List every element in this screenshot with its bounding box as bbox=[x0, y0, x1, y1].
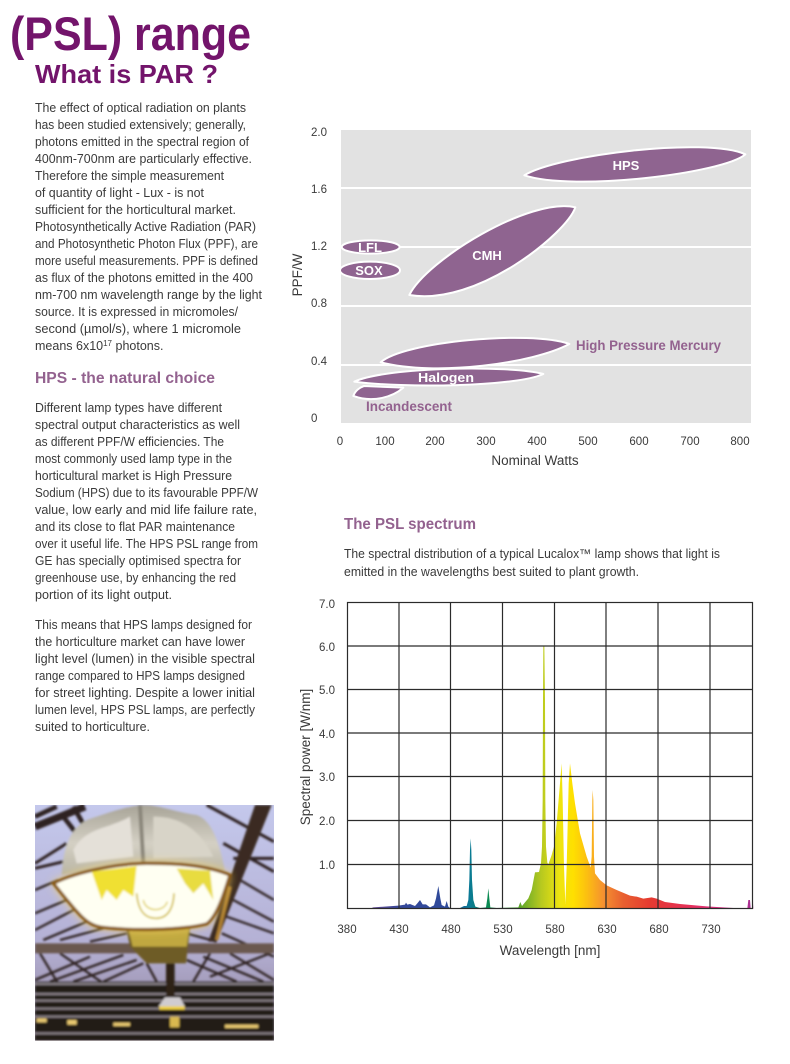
y axis labels: 2.0 bbox=[319, 816, 335, 828]
reflector bag bbox=[62, 805, 225, 875]
yellow fringes bbox=[92, 866, 137, 900]
x axis labels: 200 bbox=[425, 436, 445, 448]
y axis labels: 6.0 bbox=[319, 642, 335, 654]
y axis labels: 0.4 bbox=[311, 356, 328, 368]
y axis labels: 2.0 bbox=[311, 127, 327, 139]
text block: horticulture lamps: lumen level, HPS PSL lamps, are perfectly bbox=[35, 703, 256, 717]
text block: what is PAR: nm-700 nm wavelength range by the light bbox=[35, 288, 263, 302]
photo: lamp in greenhouse bbox=[35, 805, 274, 1041]
lamp type labels: HPS bbox=[613, 158, 640, 173]
text block: what is PAR: Photosynthetically Active Radiation (PAR) bbox=[35, 220, 256, 234]
horizontal girder bbox=[35, 943, 274, 953]
x axis labels: 300 bbox=[476, 436, 496, 448]
text block: what is PAR: more useful measurements. PPF is defined bbox=[35, 254, 258, 268]
lamp type labels: SOX bbox=[355, 263, 383, 278]
x axis labels: 580 bbox=[545, 924, 565, 936]
x axis labels: Nominal Watts bbox=[491, 453, 579, 468]
lamp type labels bbox=[355, 158, 721, 414]
y axis labels: 1.6 bbox=[311, 184, 327, 196]
glowing lamp opening bbox=[53, 863, 230, 930]
x axis labels: Wavelength [nm] bbox=[500, 943, 600, 958]
text block: spectral distribution bbox=[344, 547, 720, 579]
text block: spectral distribution: The spectral distribution of a typical Lucalox™ lamp shows that light is bbox=[344, 547, 720, 561]
text block: HPS: and its close to flat PAR maintenance bbox=[35, 520, 235, 534]
text block: what is PAR: 17 bbox=[103, 339, 113, 348]
y axis labels bbox=[298, 599, 335, 872]
heading: What is PAR: What is PAR ? bbox=[35, 59, 218, 89]
lamp base bbox=[126, 928, 190, 963]
text block: horticulture lamps: suited to horticulture. bbox=[35, 720, 150, 734]
text block: HPS: GE has specially optimised spectra for bbox=[35, 554, 241, 568]
x axis labels: 400 bbox=[527, 436, 547, 448]
diagonal roof girder bbox=[208, 805, 272, 942]
chart: PPF/W against nominal watts bbox=[290, 127, 751, 468]
text block: HPS: Sodium (HPS) due to its favourable PPF/W bbox=[35, 486, 258, 500]
text block: horticulture lamps: light level (lumen) in the visible spectral bbox=[35, 652, 255, 666]
x axis labels: 680 bbox=[649, 924, 669, 936]
x axis labels: 480 bbox=[441, 924, 461, 936]
y axis labels: 0.8 bbox=[311, 298, 327, 310]
text block: HPS: over it useful life. The HPS PSL range from bbox=[35, 537, 258, 551]
text block: HPS bbox=[35, 401, 258, 602]
x axis labels: 600 bbox=[629, 436, 649, 448]
text block: what is PAR: 400nm-700nm are particularly effective. bbox=[35, 152, 252, 166]
x axis labels: 430 bbox=[389, 924, 409, 936]
text block: what is PAR: photons. bbox=[112, 339, 163, 353]
y axis labels: 4.0 bbox=[319, 729, 335, 741]
text block: HPS: Different lamp types have different bbox=[35, 401, 223, 415]
text block: horticulture lamps: This means that HPS lamps designed for bbox=[35, 618, 252, 632]
x axis labels: 530 bbox=[493, 924, 513, 936]
glow halo bbox=[53, 863, 230, 930]
y axis labels: 5.0 bbox=[319, 685, 335, 697]
lower greenhouse bbox=[35, 982, 274, 1041]
lamp type labels: High Pressure Mercury bbox=[576, 338, 721, 353]
text block: HPS: portion of its light output. bbox=[35, 588, 172, 602]
text block: what is PAR: means 6x10 bbox=[35, 339, 103, 353]
text block: horticulture lamps: the horticulture market can have lower bbox=[35, 635, 245, 649]
text block: horticulture lamps bbox=[35, 618, 256, 734]
text block: HPS: greenhouse use, by enhancing the red bbox=[35, 571, 236, 585]
title: (PSL) range bbox=[10, 7, 251, 60]
y axis labels: 1.2 bbox=[311, 241, 327, 253]
lamp type labels: LFL bbox=[358, 240, 382, 255]
y axis labels: 7.0 bbox=[319, 599, 335, 611]
y axis labels: 0 bbox=[311, 413, 317, 425]
x axis labels: 500 bbox=[578, 436, 598, 448]
text block: what is PAR bbox=[35, 101, 263, 353]
text block: what is PAR: photons emitted in the spectral region of bbox=[35, 135, 250, 149]
roof beams bbox=[35, 805, 274, 987]
x axis labels: 800 bbox=[730, 436, 750, 448]
bulb bbox=[137, 893, 174, 918]
text block: what is PAR: has been studied extensively; generally, bbox=[35, 118, 246, 132]
heading: HPS the natural choice: HPS - the natural choice bbox=[35, 370, 215, 387]
text block: what is PAR: of quantity of light - Lux - is not bbox=[35, 186, 205, 200]
chart: lamp spectrum bbox=[298, 599, 753, 958]
text block: horticulture lamps: for street lighting. Despite a lower initial bbox=[35, 686, 255, 700]
lamp type labels: Halogen bbox=[418, 370, 474, 385]
text block: what is PAR: source. It is expressed in micromoles/ bbox=[35, 305, 239, 319]
text block: HPS: value, low early and mid life failure rate, bbox=[35, 503, 257, 517]
grid bbox=[347, 602, 753, 908]
x axis labels: 0 bbox=[337, 436, 343, 448]
text block: horticulture lamps: range compared to HPS lamps designed bbox=[35, 669, 245, 683]
x axis labels: 380 bbox=[337, 924, 357, 936]
text block: what is PAR: Therefore the simple measurement bbox=[35, 169, 225, 183]
x axis labels: 730 bbox=[701, 924, 721, 936]
y axis labels: 1.0 bbox=[319, 860, 335, 872]
lamp type labels: CMH bbox=[472, 248, 502, 263]
text block: what is PAR: and Photosynthetic Photon Flux (PPF), are bbox=[35, 237, 258, 251]
x axis labels: 700 bbox=[680, 436, 700, 448]
stem bbox=[166, 963, 175, 997]
y axis labels: Spectral power [W/nm] bbox=[298, 689, 313, 825]
y axis labels: PPF/W bbox=[290, 253, 305, 296]
y axis labels bbox=[290, 127, 328, 425]
lamp type labels: Incandescent bbox=[366, 399, 453, 414]
text block: what is PAR: The effect of optical radiation on plants bbox=[35, 101, 246, 115]
text block: spectral distribution: emitted in the wavelengths best suited to plant growth. bbox=[344, 565, 639, 579]
text block: HPS: most commonly used lamp type in the bbox=[35, 452, 232, 466]
x axis labels bbox=[337, 436, 750, 468]
second lamp bbox=[158, 997, 185, 1007]
x axis labels bbox=[337, 924, 721, 958]
text block: HPS: horticultural market is High Pressure bbox=[35, 469, 232, 483]
text block: what is PAR: sufficient for the horticultural market. bbox=[35, 203, 236, 217]
text block: what is PAR: as flux of the photons emitted in the 400 bbox=[35, 271, 253, 285]
text block: HPS: as different PPF/W efficiencies. The bbox=[35, 435, 224, 449]
x axis labels: 630 bbox=[597, 924, 617, 936]
y axis labels: 3.0 bbox=[319, 772, 335, 784]
lamp type ellipses bbox=[340, 147, 745, 399]
spectrum curve bbox=[370, 646, 753, 909]
text block: what is PAR: second (µmol/s), where 1 micromole bbox=[35, 322, 241, 336]
x axis labels: 100 bbox=[375, 436, 395, 448]
heading: The PSL spectrum: The PSL spectrum bbox=[344, 516, 476, 533]
text block: HPS: spectral output characteristics as well bbox=[35, 418, 240, 432]
